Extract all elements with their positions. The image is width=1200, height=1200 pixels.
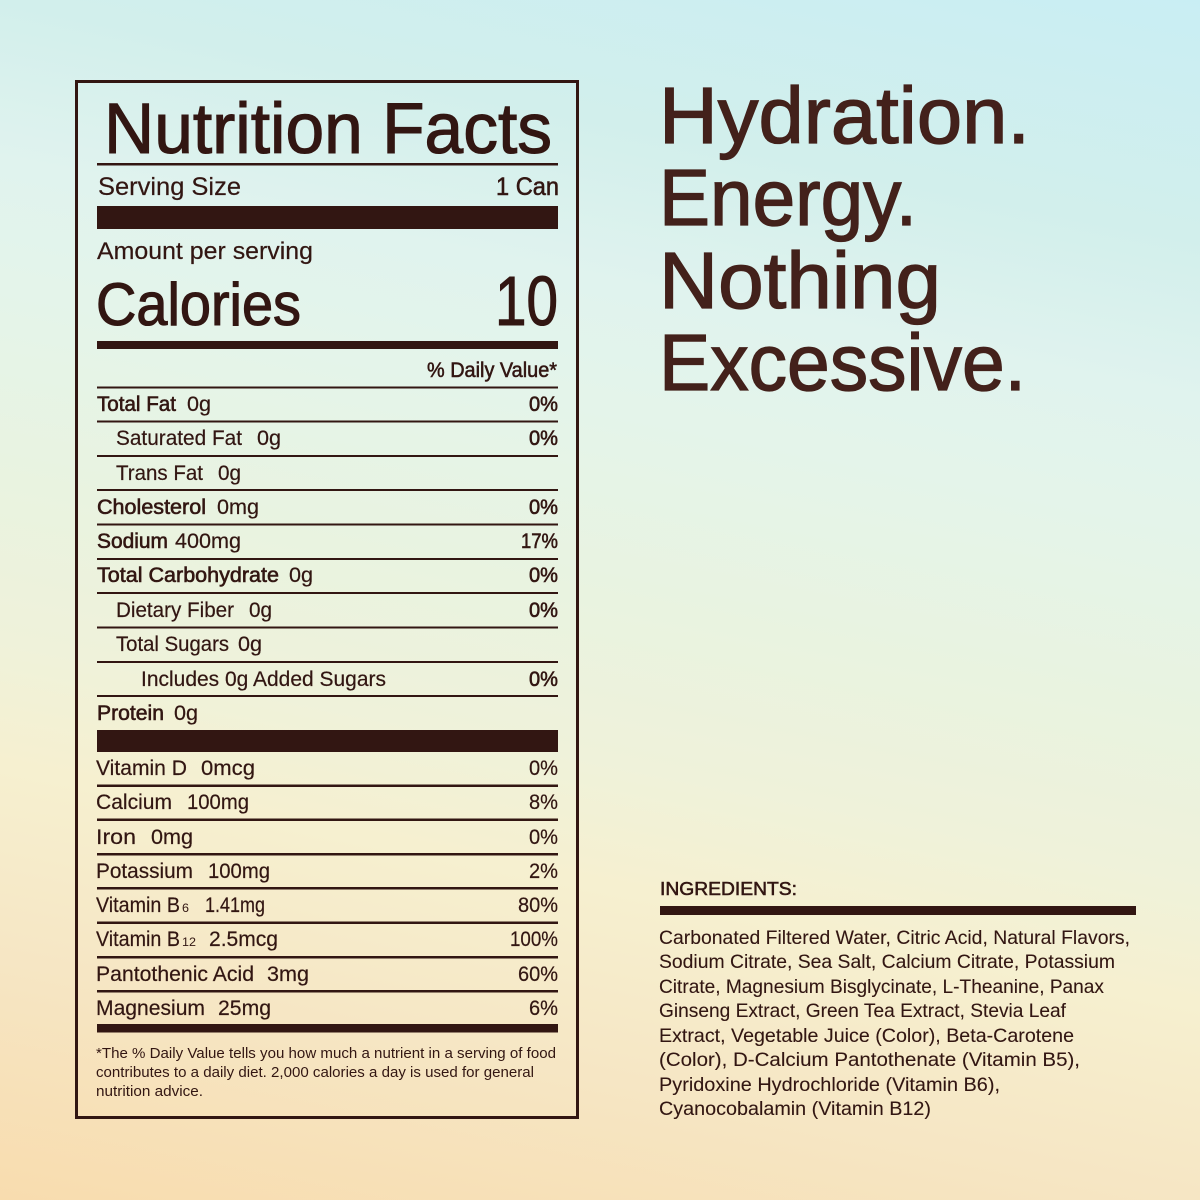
row: vitamin d: 0% [529,757,558,780]
row: potassium [96,860,558,883]
heading: Nutrition Facts: Nutrition Facts [104,90,552,169]
row: total fat: Total Fat [97,393,176,416]
daily value header: % Daily Value* [427,359,557,382]
row: total carbohydrate [97,564,558,587]
row: potassium: Potassium [96,860,193,883]
row: total fat: 0g [187,393,211,416]
row: vitamin d: 0mcg [201,757,255,780]
row: saturated fat: 0g [257,427,281,450]
footnote: nutrition advice. [96,1084,203,1100]
row: pantothenic acid: 3mg [267,963,309,986]
row: added sugars: 0% [529,668,558,691]
row: iron: Iron [96,826,136,849]
row: vitamin d: Vitamin D [96,757,187,780]
ingredients list: Carbonated Filtered Water, Citric Acid, Natural Flavors, [659,927,1130,949]
row: magnesium: Magnesium [96,997,205,1020]
row: saturated fat: 0% [529,427,558,450]
calories row: 10 [495,262,558,340]
row: potassium: 2% [529,860,558,883]
row: cholesterol: Cholesterol [97,496,206,519]
row: cholesterol: 0mg [217,496,259,519]
ingredients list: Extract, Vegetable Juice (Color), Beta-Carotene [659,1025,1074,1047]
row: dietary fiber [116,599,558,622]
row: dietary fiber: 0g [249,599,272,622]
row: sodium [97,530,558,553]
row: magnesium: 25mg [218,997,271,1020]
row: pantothenic acid: 60% [518,963,558,986]
ingredients list: Citrate, Magnesium Bisglycinate, L-Theanine, Panax [659,976,1104,998]
row: added sugars: Includes 0g Added Sugars [141,668,386,691]
row: vitamin b12: 2.5mcg [209,928,278,951]
row: total carbohydrate: 0% [529,564,558,587]
headline: Nothing [659,236,941,325]
row: calcium [96,791,558,814]
row: calcium: 100mg [187,791,249,814]
row: calcium: 8% [529,791,558,814]
row: vitamin b12: 12 [182,935,196,949]
footnote: contributes to a daily diet. 2,000 calories a day is used for general [96,1065,534,1081]
row: trans fat: 0g [218,462,241,485]
row: vitamin d [96,757,558,780]
ingredients list: Sodium Citrate, Sea Salt, Calcium Citrate, Potassium [659,951,1115,973]
serving size row: 1 Can [496,173,559,201]
ingredients list: (Color), D-Calcium Pantothenate (Vitamin B5), [659,1049,1080,1071]
row: saturated fat: Saturated Fat [116,427,242,450]
row: vitamin b6: 80% [518,894,558,917]
calories row: Calories [96,271,301,338]
amount per serving: Amount per serving [97,238,313,265]
serving size row [98,173,559,201]
headline: Energy. [659,153,917,242]
row: potassium: 100mg [208,860,270,883]
row: saturated fat [116,427,558,450]
row: vitamin b12: Vitamin B [96,928,180,951]
row: added sugars [141,668,558,691]
row: protein: Protein [97,702,164,725]
footnote [96,1046,556,1100]
calories row [96,262,558,340]
row: total sugars: 0g [238,633,262,656]
row: protein: 0g [174,702,198,725]
row: iron: 0mg [151,826,193,849]
ingredients list [659,927,1130,1120]
row: trans fat: Trans Fat [116,462,203,485]
row: pantothenic acid [96,963,558,986]
row: pantothenic acid: Pantothenic Acid [96,963,254,986]
row: iron [96,826,558,849]
row: vitamin b12: 100% [510,928,558,951]
headline: Excessive. [659,318,1026,407]
row: vitamin b6: Vitamin B [96,894,180,917]
row: cholesterol [97,496,558,519]
row: total carbohydrate: Total Carbohydrate [97,564,279,587]
row: magnesium: 6% [529,997,558,1020]
serving size row: Serving Size [98,173,241,201]
row: vitamin b6: 6 [182,901,189,915]
row: sodium: Sodium [97,530,168,553]
row: dietary fiber: Dietary Fiber [116,599,234,622]
row: calcium: Calcium [96,791,172,814]
row: cholesterol: 0% [529,496,558,519]
row: vitamin b12 [96,928,558,951]
ingredients heading: INGREDIENTS: [660,879,797,899]
row: total carbohydrate: 0g [289,564,313,587]
row: dietary fiber: 0% [529,599,558,622]
row: sodium: 400mg [175,530,241,553]
ingredients list: Cyanocobalamin (Vitamin B12) [659,1098,931,1120]
row: protein [97,702,198,725]
ingredients list: Pyridoxine Hydrochloride (Vitamin B6), [659,1074,1000,1096]
row: total fat [97,393,558,416]
headline [659,71,1030,407]
footnote: *The % Daily Value tells you how much a nutrient in a serving of food [96,1046,556,1062]
row: total sugars: Total Sugars [116,633,229,656]
vitamins and minerals table [96,757,558,1020]
row: vitamin b6 [96,894,558,917]
row: magnesium [96,997,558,1020]
panel: nutrition facts label [76,82,578,1118]
row: sodium: 17% [521,530,558,553]
row: iron: 0% [529,826,558,849]
headline: Hydration. [659,71,1030,160]
nutrient table [97,386,558,725]
row: vitamin b6: 1.41mg [205,894,265,917]
row: total fat: 0% [529,393,558,416]
ingredients list: Ginseng Extract, Green Tea Extract, Stevia Leaf [659,1000,1067,1022]
